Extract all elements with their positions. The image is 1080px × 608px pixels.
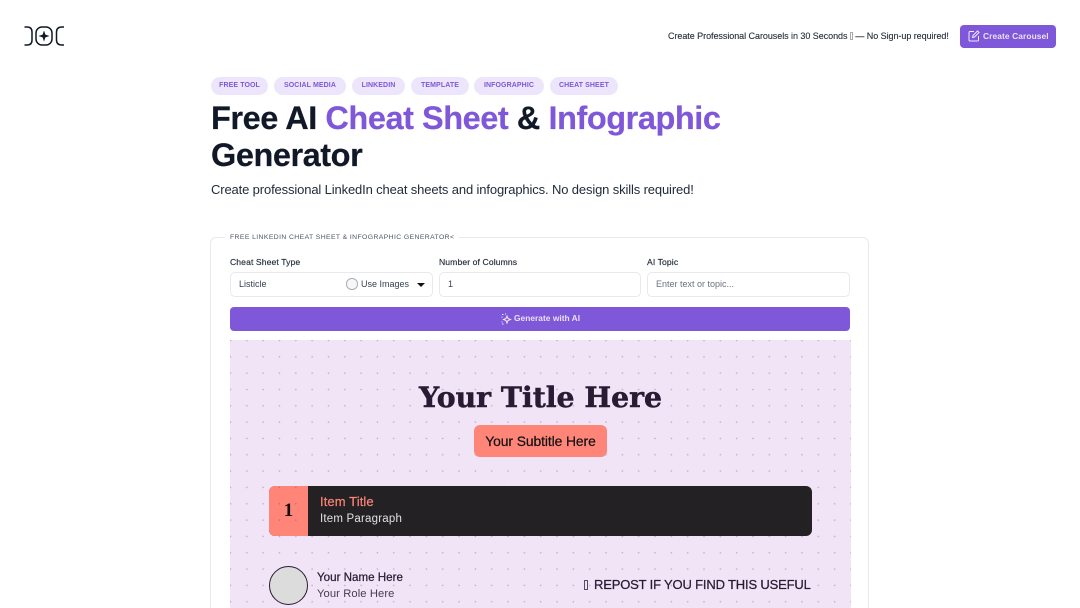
item card <box>269 486 812 536</box>
main heading: Generator <box>211 137 362 173</box>
input: columns <box>439 272 641 297</box>
tag <box>411 77 469 95</box>
create carousel button <box>960 25 1056 48</box>
icon: sparkle <box>502 314 512 324</box>
tag: INFOGRAPHIC <box>484 82 534 89</box>
icon: edit <box>968 30 980 42</box>
subheading: Create professional LinkedIn cheat sheets and infographics. No design skills required! <box>211 182 694 197</box>
button label: Create Carousel <box>983 31 1049 41</box>
label: type: Cheat Sheet Type <box>230 257 300 267</box>
input: topic <box>647 272 850 297</box>
select: cheat sheet type <box>230 272 433 297</box>
preview title: Your Title Here <box>419 380 662 414</box>
panel legend <box>225 233 459 243</box>
label: topic: AI Topic <box>647 257 678 267</box>
tag: LINKEDIN <box>362 82 395 89</box>
tag: TEMPLATE <box>421 82 459 89</box>
input: topic: Enter text or topic... <box>656 279 734 289</box>
header promo text: Create Professional Carousels in 30 Seconds — No Sign-up required! <box>668 31 949 41</box>
subtitle badge: Your Subtitle Here <box>485 433 596 449</box>
avatar <box>269 566 308 605</box>
main heading <box>211 100 720 173</box>
radio label: Use Images <box>361 279 409 289</box>
tag <box>274 77 346 95</box>
number block: 1 <box>284 500 293 521</box>
select value: Listicle <box>239 279 267 289</box>
dropdown arrow <box>417 283 425 287</box>
dot pattern <box>230 340 851 608</box>
main heading: Free AI Cheat Sheet & Infographic <box>211 100 720 136</box>
tag: FREE TOOL <box>219 82 260 89</box>
input: columns: 1 <box>448 279 453 289</box>
panel: infographic preview <box>230 340 851 608</box>
tag <box>550 77 618 95</box>
author role: Your Role Here <box>317 588 394 600</box>
tag <box>352 77 405 95</box>
repost call to action: REPOST IF YOU FIND THIS USEFUL <box>594 577 811 592</box>
tag <box>211 77 268 95</box>
button label: Generate with AI <box>514 313 580 323</box>
tag <box>474 77 544 95</box>
panel: generator <box>210 237 869 608</box>
number block <box>269 486 308 536</box>
generate button <box>230 307 850 331</box>
item title: Item Title <box>320 494 374 509</box>
tag: SOCIAL MEDIA <box>284 82 336 89</box>
subtitle badge <box>474 425 607 457</box>
label: columns: Number of Columns <box>439 257 517 267</box>
author name: Your Name Here <box>317 571 403 584</box>
tag: CHEAT SHEET <box>559 82 609 89</box>
tag row <box>211 77 618 95</box>
panel legend: FREE LINKEDIN CHEAT SHEET & INFOGRAPHIC GENERATOR< <box>230 234 454 241</box>
logo <box>24 26 64 46</box>
item paragraph: Item Paragraph <box>320 513 402 525</box>
radio: use images <box>346 278 358 290</box>
